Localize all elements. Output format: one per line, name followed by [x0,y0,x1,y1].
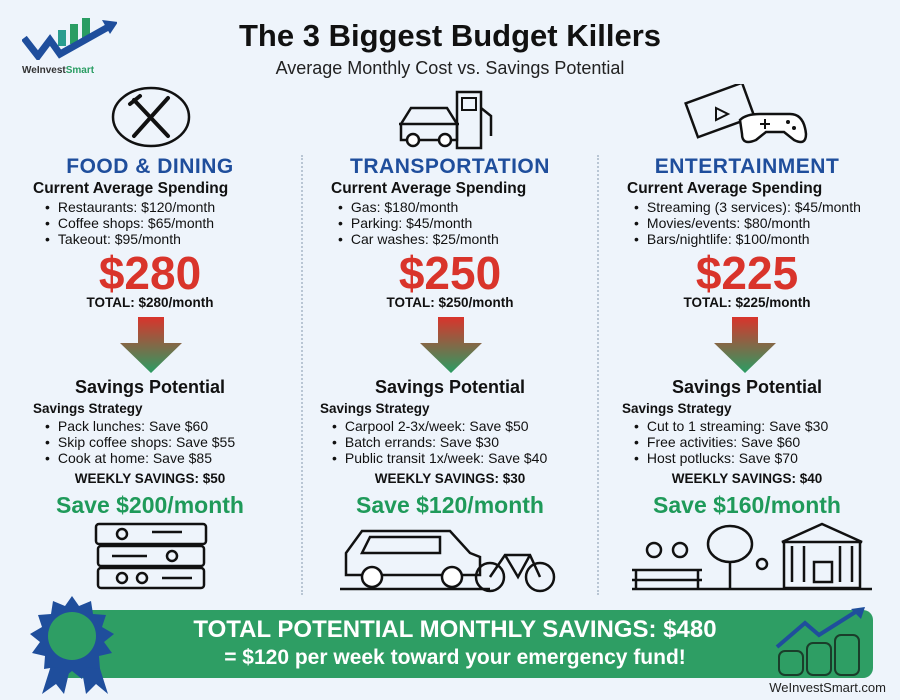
illustration: van and bicycle [340,530,556,592]
panel: transportation: Carpool 2-3x/week: Save $50 [345,418,529,434]
icon: ticket and gamepad [684,84,808,144]
panel: food: WEEKLY SAVINGS: $50 [75,471,225,486]
panel: transportation: Parking: $45/month [351,215,472,231]
panel: entertainment: Savings Strategy [622,401,732,416]
icon: car and gas pump [399,90,492,150]
panel: entertainment: Save $160/month [653,492,841,518]
banner: total savings: TOTAL POTENTIAL MONTHLY SAVINGS: $480 [193,616,717,643]
title: The 3 Biggest Budget Killers [239,18,661,53]
panel: transportation: Save $120/month [356,492,544,518]
banner: total savings: = $120 per week toward your emergency fund! [224,646,686,669]
panel: transportation [320,155,550,518]
panel: food: Skip coffee shops: Save $55 [58,434,235,450]
panel: food: Takeout: $95/month [58,231,181,247]
arrow [120,317,182,373]
panel: transportation: Current Average Spending [331,180,526,197]
panel: food: Restaurants: $120/month [58,199,215,215]
spending: Current Average Spending [33,180,228,197]
panel: transportation: Public transit 1x/week: Save $40 [345,450,547,466]
panel: entertainment: Bars/nightlife: $100/month [647,231,810,247]
logo: WeInvestSmart [22,65,94,76]
savings: Savings Potential [75,377,225,397]
total: $280 [99,247,201,299]
panel: entertainment: Host potlucks: Save $70 [647,450,798,466]
icon: fork and knife [112,86,190,148]
panel: food [33,155,244,518]
panel: entertainment [622,155,861,518]
footer url: WeInvestSmart.com [769,680,886,695]
panel: transportation: Gas: $180/month [351,199,458,215]
panel: transportation: Savings Potential [375,377,525,397]
panel: food: Save $200/month [56,492,244,518]
panel: food: Savings Strategy [33,401,143,416]
banner: total savings [55,610,873,678]
icon: ribbon badge [30,596,114,694]
panel: entertainment: Current Average Spending [627,180,822,197]
illustration: park and library [632,522,872,590]
panel: food: Pack lunches: Save $60 [58,418,208,434]
panel: entertainment: $225 [696,247,798,299]
panel: entertainment: Movies/events: $80/month [647,215,810,231]
icon: coins with arrow [776,607,865,676]
logo [22,18,117,76]
panel: food: TOTAL: $280/month [86,295,214,310]
panel: transportation: TOTAL: $250/month [386,295,514,310]
subtitle: Average Monthly Cost vs. Savings Potential [276,58,624,78]
panel: entertainment: Streaming (3 services): $45/month [647,199,861,215]
panel: transportation: $250 [399,247,501,299]
panel: transportation: Savings Strategy [320,401,430,416]
heading: FOOD & DINING [66,155,234,178]
panel: entertainment: Cut to 1 streaming: Save $30 [647,418,828,434]
panel: food: Coffee shops: $65/month [58,215,214,231]
panel: entertainment: Savings Potential [672,377,822,397]
illustration: meal prep containers [94,522,208,590]
panel: entertainment: TOTAL: $225/month [683,295,810,310]
panel: food: Cook at home: Save $85 [58,450,212,466]
panel: entertainment: WEEKLY SAVINGS: $40 [672,471,822,486]
panel: transportation: TRANSPORTATION [350,155,550,178]
panel: transportation: Batch errands: Save $30 [345,434,499,450]
panel: transportation: Car washes: $25/month [351,231,499,247]
panel: entertainment: Free activities: Save $60 [647,434,800,450]
panel: transportation: WEEKLY SAVINGS: $30 [375,471,525,486]
panel: entertainment: ENTERTAINMENT [655,155,839,178]
